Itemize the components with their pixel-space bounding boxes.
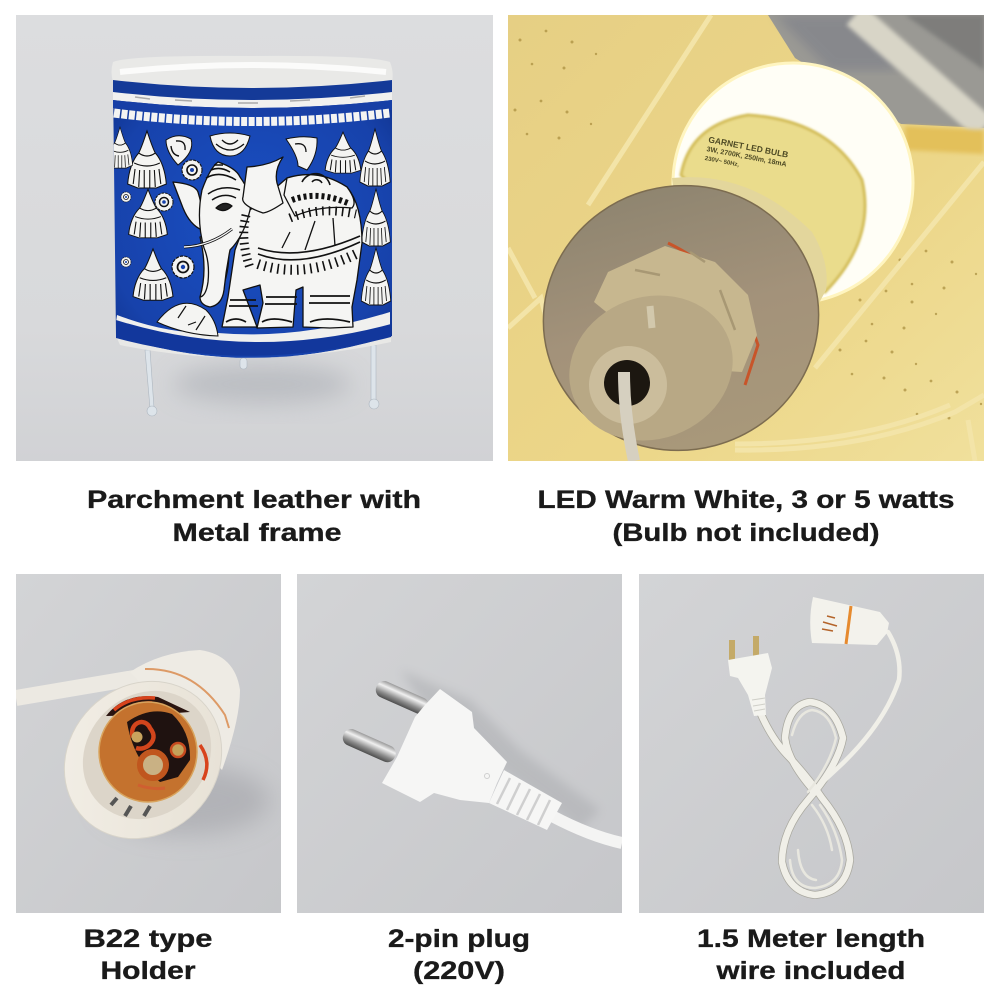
icon: lamp holder disc bbox=[542, 184, 820, 452]
icon: lamp metal legs bbox=[145, 345, 379, 416]
icon: lamp painted cylinder bbox=[112, 56, 393, 358]
heading: plug caption: (220V) bbox=[413, 957, 505, 985]
heading: parchment caption: Metal frame bbox=[172, 519, 342, 547]
icon: plug body bbox=[382, 689, 562, 830]
cup dark interior bbox=[127, 711, 190, 782]
heading: holder caption: Holder bbox=[100, 957, 196, 985]
panel: B22 holder photo bbox=[16, 574, 281, 913]
heading: holder caption bbox=[84, 925, 213, 985]
bulb print bbox=[704, 137, 788, 168]
heading: wire caption bbox=[697, 925, 925, 985]
bulb print: GARNET LED BULB bbox=[708, 134, 789, 160]
heading: LED caption: (Bulb not included) bbox=[612, 519, 880, 547]
red wires behind cup bbox=[106, 696, 190, 716]
panel: LED bulb photo bbox=[508, 15, 984, 481]
panel: wire photo bbox=[639, 574, 984, 913]
heading: parchment caption: Parchment leather with bbox=[87, 486, 421, 514]
icon: coiled wire bbox=[760, 632, 900, 895]
panel: 2-pin plug photo bbox=[297, 574, 622, 913]
heading: LED caption: LED Warm White, 3 or 5 watts bbox=[538, 486, 954, 514]
heading: LED caption bbox=[538, 486, 954, 547]
icon: plug bbox=[728, 636, 772, 716]
icon: tassel and flower motifs bbox=[107, 127, 391, 336]
bulb print: 3W, 2700K, 250lm, 18mA bbox=[706, 146, 787, 169]
icon: elephant bbox=[173, 157, 362, 328]
cable bbox=[16, 677, 140, 698]
icon: holder bbox=[810, 597, 889, 645]
fringe border bbox=[114, 113, 390, 122]
plug shadow bbox=[407, 675, 596, 824]
shade speckles bbox=[514, 30, 982, 419]
icon: glowing bulb bbox=[672, 63, 913, 305]
heading: plug caption bbox=[388, 925, 530, 985]
blanket decoration bbox=[284, 175, 354, 216]
shade wires bbox=[508, 15, 984, 461]
panel: parchment lamp photo bbox=[16, 15, 493, 461]
icon: plug pins bbox=[342, 681, 428, 762]
icon: socket nut and cap bbox=[570, 242, 760, 440]
shade top-right background bbox=[768, 15, 984, 154]
cable bbox=[552, 816, 622, 843]
heading: parchment caption bbox=[87, 486, 421, 547]
cable bbox=[624, 372, 634, 461]
bulb print: 230V~ 50Hz, bbox=[704, 156, 740, 169]
holder shadow bbox=[152, 764, 271, 840]
lamp shadow bbox=[172, 364, 352, 404]
heading: plug caption: 2-pin plug bbox=[388, 925, 530, 953]
heading: holder caption: B22 type bbox=[84, 925, 213, 953]
heading: wire caption: wire included bbox=[715, 957, 906, 985]
icon: B22 holder bbox=[64, 650, 240, 839]
heading: wire caption: 1.5 Meter length bbox=[697, 925, 925, 953]
